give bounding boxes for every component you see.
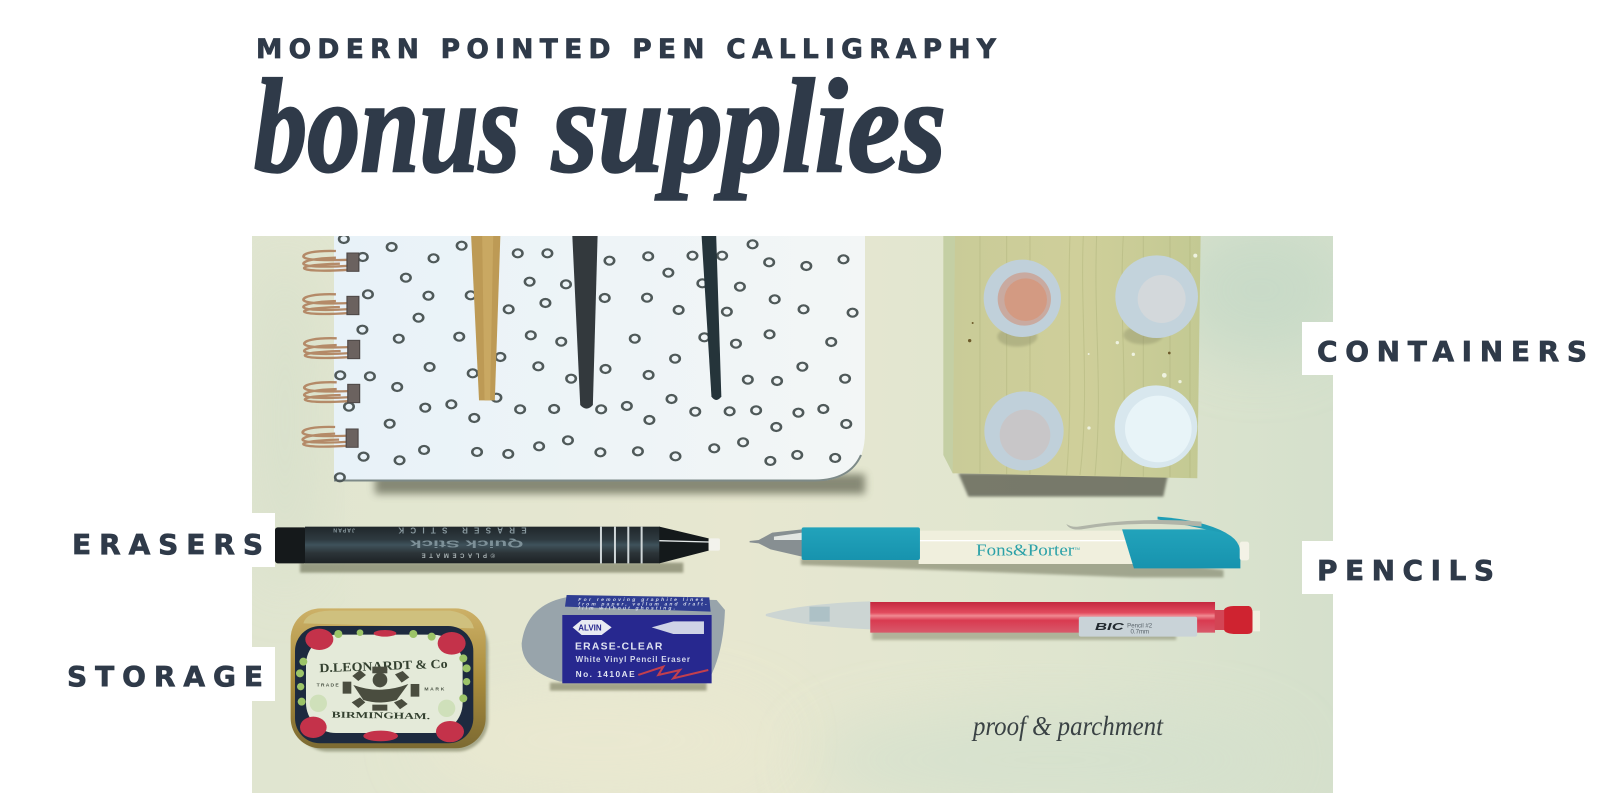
label: containers: CONTAINERS [1317, 335, 1587, 368]
eraser stick: Quick Stick [409, 538, 523, 549]
label: storage [60, 647, 275, 701]
storage tin: TRADE [317, 683, 339, 689]
subtitle: MODERN POINTED PEN CALLIGRAPHY [256, 34, 997, 65]
red mechanical pencil: 0.7mm [1131, 629, 1149, 635]
eraser stick: ©PLACEMATE [422, 551, 495, 558]
blue mechanical pencil [750, 517, 1249, 577]
container block [943, 236, 1201, 497]
storage tin: D.LEONARDT & Co [319, 657, 448, 675]
vinyl eraser: For removing graphite lines [578, 597, 704, 603]
label: erasers [60, 513, 275, 567]
pen holders [471, 236, 721, 409]
blue mechanical pencil: TM [1074, 546, 1081, 551]
label: storage: STORAGE [67, 660, 263, 693]
crown emblem [343, 667, 419, 711]
wood grain [980, 236, 1190, 478]
vinyl eraser [522, 595, 725, 691]
red mechanical pencil: Pencil #2 [1127, 623, 1153, 629]
notebook [303, 235, 865, 494]
red mechanical pencil [766, 601, 1260, 640]
spiral binding [303, 251, 360, 447]
vinyl eraser: No. 1410AE [576, 669, 635, 679]
storage tin: MARK [424, 687, 445, 693]
label: pencils [1302, 541, 1600, 594]
eraser stick: JAPAN [333, 526, 355, 532]
eraser stick [275, 525, 720, 573]
vinyl eraser: ALVIN [578, 623, 602, 633]
photo: flat lay of supplies [252, 220, 1350, 793]
vinyl eraser: film without ghosting. [578, 606, 675, 612]
label: pencils: PENCILS [1317, 554, 1494, 587]
vinyl eraser: from paper, vellum and draft- [578, 601, 707, 607]
polka dot pattern [335, 235, 857, 481]
title: bonus [254, 52, 520, 200]
title: supplies [551, 52, 946, 200]
vinyl eraser: White Vinyl Pencil Eraser [576, 655, 690, 664]
vinyl eraser: ERASE-CLEAR [575, 641, 663, 652]
eraser stick: ERASER STICK [398, 525, 527, 534]
blue mechanical pencil: Fons&Porter [976, 540, 1075, 559]
red mechanical pencil: BIC [1095, 622, 1125, 633]
storage tin: BIRMINGHAM. [332, 709, 430, 721]
tin floral corners [300, 629, 466, 742]
label: containers [1302, 322, 1600, 375]
title [254, 52, 946, 200]
signature: proof & parchment [971, 711, 1164, 741]
containers: four caps [968, 254, 1198, 471]
storage tin [291, 608, 488, 752]
label: erasers: ERASERS [72, 528, 263, 561]
